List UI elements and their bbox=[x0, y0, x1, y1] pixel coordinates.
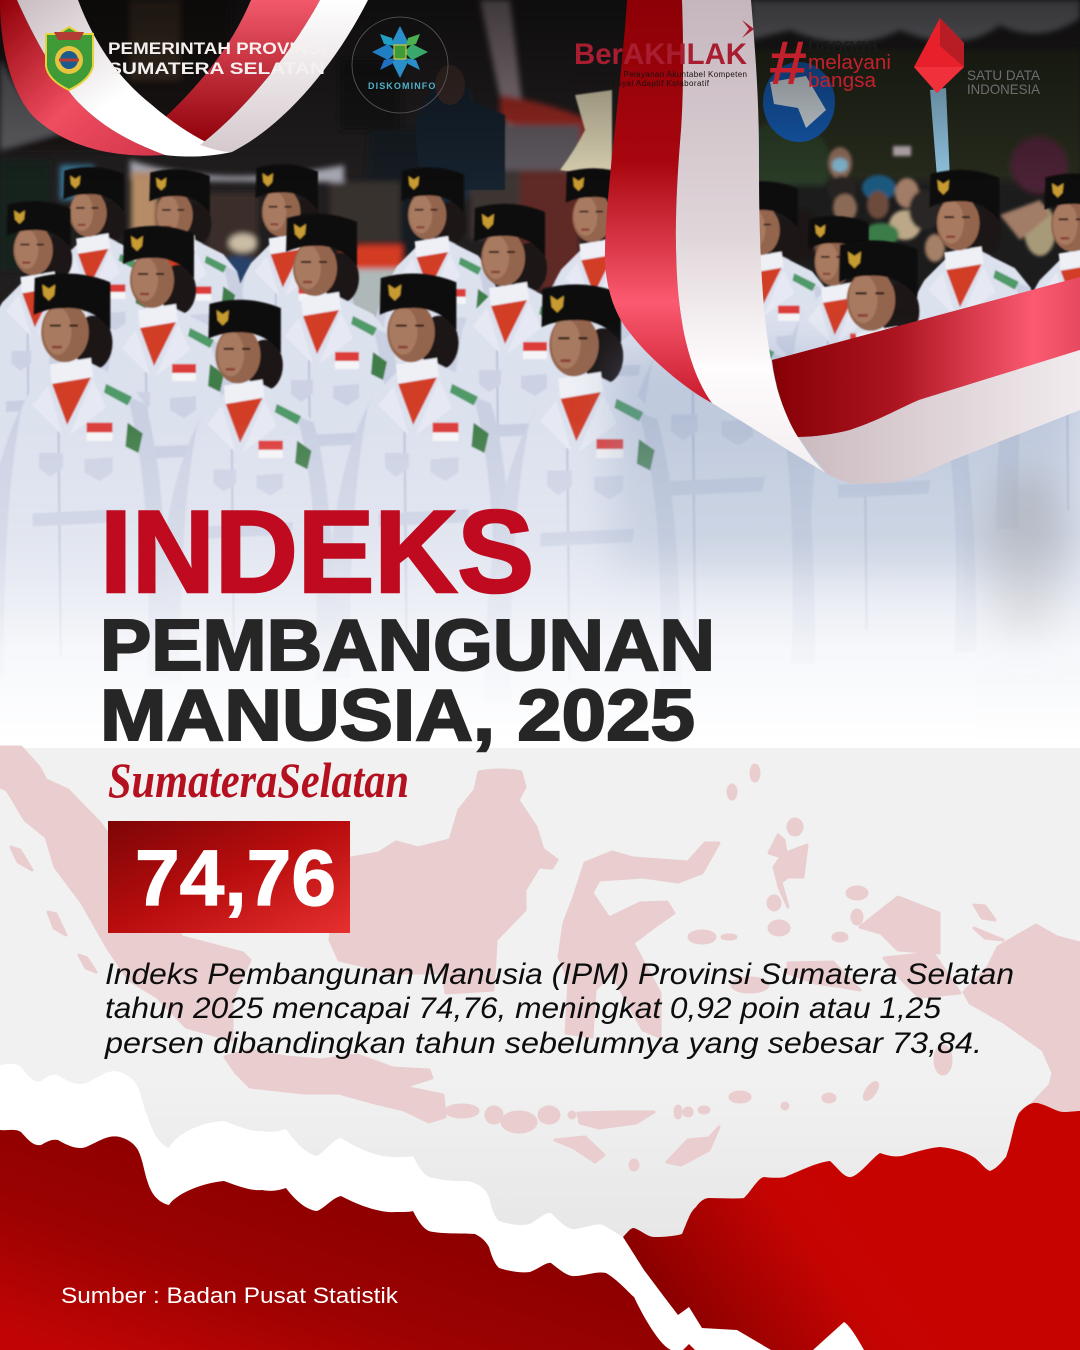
description text: Indeks Pembangunan Manusia (IPM) Provinsi Sumatera Selatan bbox=[105, 958, 1014, 991]
torn paper: white layer bbox=[0, 1064, 771, 1350]
logo: BerAKHLAK: BerAKHLAK bbox=[574, 38, 748, 71]
camera man bbox=[415, 71, 505, 190]
logo: bangga melayani bangsa bbox=[769, 29, 891, 98]
road sign bbox=[763, 62, 835, 142]
logo: Diskominfo bbox=[352, 17, 448, 113]
logo: bangga melayani bangsa: bangsa bbox=[808, 70, 877, 92]
map: Java bbox=[225, 1050, 445, 1122]
description text: persen dibandingkan tahun sebelumnya yang sebesar 73,84. bbox=[104, 1027, 982, 1060]
logo: bangga melayani bangsa: # bbox=[769, 29, 807, 98]
value box: 74,76 bbox=[108, 821, 350, 933]
map of Indonesia bbox=[0, 747, 1080, 1170]
blue banner bbox=[930, 88, 950, 190]
ribbon: top left bbox=[0, 0, 368, 157]
map: Sulawesi bbox=[559, 843, 719, 1037]
photo background: paskibraka parade bbox=[0, 0, 1080, 860]
logo: Satu Data Indonesia: INDONESIA bbox=[967, 81, 1041, 97]
title: Pembangunan Manusia, 2025: MANUSIA, 2025 bbox=[100, 676, 695, 756]
ceremonial ornament bbox=[560, 90, 612, 178]
map: Maluku bbox=[769, 835, 807, 907]
back row marchers bbox=[0, 164, 1080, 674]
title: Pembangunan Manusia, 2025 bbox=[100, 606, 715, 756]
spectators on the right bbox=[778, 146, 1056, 262]
logo: BerAKHLAK: Berorientasi Pelayanan Akuntabel Kompeten bbox=[574, 70, 747, 79]
logo: bangga melayani bangsa: bangga bbox=[808, 35, 879, 57]
logo: Satu Data Indonesia bbox=[914, 18, 1041, 97]
description text bbox=[104, 958, 1014, 1060]
map: Papua bbox=[964, 925, 1080, 1150]
value box: 74,76: 74,76 bbox=[135, 833, 336, 922]
logo: Diskominfo: DISKOMINFO bbox=[368, 81, 436, 91]
lower panel background bbox=[0, 748, 1080, 1350]
heading: government name: PEMERINTAH PROVINSI bbox=[108, 39, 326, 58]
heading: government name bbox=[108, 39, 326, 78]
source note: Sumber : Badan Pusat Statistik bbox=[61, 1283, 399, 1308]
heading: government name: SUMATERA SELATAN bbox=[108, 59, 325, 78]
logo: BerAKHLAK bbox=[572, 20, 754, 88]
torn paper: left dark red bbox=[0, 1130, 671, 1350]
ribbon: top right bbox=[605, 0, 1080, 484]
logo: BerAKHLAK: Harmonis Loyal Adaptif Kolaboratif bbox=[572, 79, 710, 88]
description text: tahun 2025 mencapai 74,76, meningkat 0,92 poin atau 1,25 bbox=[105, 992, 941, 1025]
map: Kalimantan bbox=[330, 770, 557, 993]
torn paper: small white peak bbox=[813, 1322, 864, 1350]
logo: Satu Data Indonesia: SATU DATA bbox=[967, 67, 1041, 83]
crowd and stage backdrop bbox=[0, 0, 1080, 375]
torn paper: right red bbox=[623, 1103, 1080, 1350]
front row marchers bbox=[0, 274, 682, 860]
map: Sumatra bbox=[0, 747, 250, 1040]
title: Pembangunan Manusia, 2025: PEMBANGUNAN bbox=[100, 606, 715, 686]
logo: provincial coat of arms bbox=[46, 27, 93, 90]
logo: bangga melayani bangsa: melayani bbox=[808, 52, 891, 74]
middle row marchers bbox=[72, 204, 977, 832]
subtitle: Sumatera Selatan: SumateraSelatan bbox=[108, 752, 409, 808]
title: INDEKS: INDEKS bbox=[100, 486, 534, 617]
